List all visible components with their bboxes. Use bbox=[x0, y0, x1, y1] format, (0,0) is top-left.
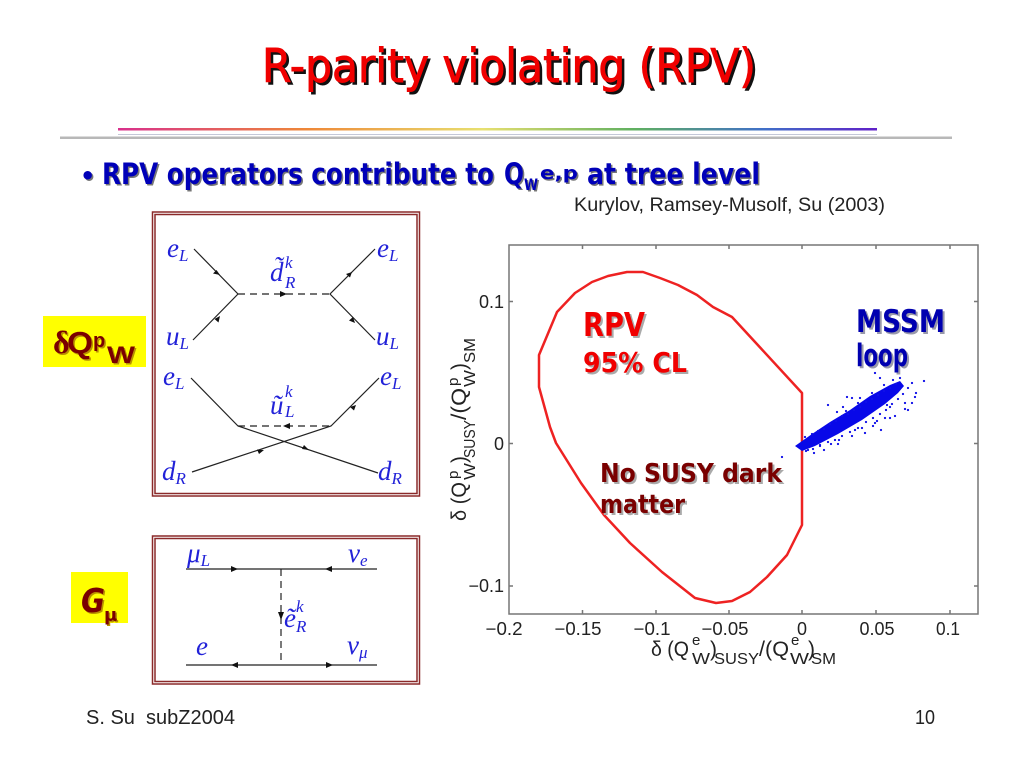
y axis title: W bbox=[462, 369, 479, 387]
panel: muon decay diagram: μ bbox=[187, 538, 201, 568]
panel: muon decay diagram: e bbox=[360, 551, 368, 570]
plot frame with ticks bbox=[509, 245, 978, 614]
label: delta Q p W: δ bbox=[54, 326, 71, 362]
label: delta Q p W: W bbox=[107, 342, 135, 369]
axis tick labels: 0.05 bbox=[860, 619, 894, 639]
x axis title: /(Q bbox=[759, 638, 789, 661]
label: G mu: G bbox=[82, 582, 106, 622]
citation: Kurylov, Ramsey-Musolf, Su (2003) bbox=[574, 195, 885, 216]
panel: muon decay diagram: ν bbox=[348, 538, 360, 568]
panel: neutral current diagrams: e bbox=[167, 233, 179, 263]
title: R-parity violating (RPV) bbox=[264, 42, 758, 96]
panel: muon decay diagram: e bbox=[196, 631, 208, 661]
annotation: RPV 95% CL: 95% CL bbox=[583, 346, 687, 379]
panel: muon decay diagram: L bbox=[200, 551, 210, 570]
panel: neutral current diagrams: e bbox=[377, 233, 389, 263]
label: delta Q p W bbox=[43, 316, 146, 370]
axis tick labels bbox=[468, 292, 960, 639]
label: delta Q p W: δ bbox=[53, 324, 70, 360]
panel: neutral current diagrams: e bbox=[380, 361, 392, 391]
axis tick labels: −0.1 bbox=[634, 619, 670, 639]
chart: Qw scatter plot bbox=[445, 245, 978, 668]
panel: neutral current diagrams: L bbox=[391, 374, 401, 393]
annotation: No SUSY dark matter: matter bbox=[600, 490, 685, 520]
axis tick labels: 0.1 bbox=[936, 619, 960, 639]
axis tick labels: −0.15 bbox=[554, 619, 602, 639]
panel: neutral current diagrams: d̃ bbox=[270, 257, 285, 287]
panel: neutral current diagrams: u bbox=[166, 321, 180, 351]
bullet heading: W bbox=[524, 175, 538, 194]
annotation: MSSM loop: MSSM bbox=[858, 306, 947, 342]
x axis title: W bbox=[692, 651, 711, 668]
panel: neutral current diagrams: k bbox=[285, 253, 293, 272]
bullet heading: W bbox=[526, 176, 540, 196]
x axis title: W bbox=[790, 651, 810, 668]
y axis title: ) bbox=[448, 456, 471, 463]
y axis title: SM bbox=[462, 338, 479, 363]
panel: neutral current diagrams: u bbox=[376, 321, 390, 351]
axis tick labels: 0 bbox=[494, 434, 504, 454]
panel: muon decay diagram: ẽ bbox=[284, 603, 297, 633]
annotation: No SUSY dark matter: No SUSY dark bbox=[602, 461, 785, 491]
panel: neutral current diagrams: R bbox=[390, 469, 402, 488]
bullet heading: RPV operators contribute to bbox=[104, 158, 496, 192]
bullet heading: e,p bbox=[542, 164, 580, 186]
annotation: No SUSY dark matter: matter bbox=[602, 492, 687, 522]
x axis title: e bbox=[791, 632, 799, 649]
axis tick labels: −0.05 bbox=[702, 619, 748, 639]
y axis title: δ (Q bbox=[448, 482, 471, 521]
panel: neutral current diagrams: e bbox=[163, 361, 175, 391]
annotation: MSSM loop: MSSM bbox=[856, 304, 945, 340]
label: delta Q p W: W bbox=[108, 344, 137, 370]
annotation: RPV 95% CL: RPV bbox=[585, 307, 647, 346]
annotation: MSSM loop: loop bbox=[858, 340, 910, 376]
annotation: MSSM loop bbox=[856, 304, 947, 376]
x axis title: δ (Q bbox=[651, 638, 689, 661]
y axis title: SUSY bbox=[462, 420, 479, 458]
footer: page number: 10 bbox=[915, 707, 935, 729]
axis tick labels: 0.1 bbox=[479, 292, 504, 312]
panel: neutral current diagrams: k bbox=[285, 382, 293, 401]
bullet heading: Q bbox=[504, 157, 524, 191]
bullet heading: at tree level bbox=[588, 158, 762, 192]
panel: muon decay diagram: R bbox=[295, 617, 307, 636]
y axis title: ) bbox=[448, 363, 471, 370]
MSSM loop scatter bbox=[782, 373, 924, 457]
x axis title: e bbox=[692, 632, 700, 649]
panel: neutral current diagrams: L bbox=[388, 334, 399, 353]
axis tick labels: 0 bbox=[797, 619, 807, 639]
bullet heading: at tree level bbox=[587, 157, 760, 191]
x axis title: SUSY bbox=[714, 651, 759, 668]
annotation: RPV 95% CL: RPV bbox=[583, 305, 645, 344]
label: delta Q p W: Q bbox=[68, 326, 94, 362]
panel: neutral current diagrams: R bbox=[284, 273, 296, 292]
title divider lines bbox=[60, 128, 952, 139]
label: G mu: μ bbox=[104, 605, 117, 626]
RPV contour bbox=[539, 272, 802, 603]
panel: neutral current diagrams: L bbox=[284, 402, 294, 421]
panel: neutral current diagrams: L bbox=[388, 246, 398, 265]
panel: neutral current diagrams: d bbox=[378, 456, 392, 486]
x axis title bbox=[651, 632, 836, 668]
panel: neutral current diagrams: R bbox=[174, 469, 186, 488]
panel: neutral current diagrams: L bbox=[178, 334, 189, 353]
panel: muon decay diagram: k bbox=[296, 597, 304, 616]
y axis title: p bbox=[445, 378, 462, 386]
label: G mu: G bbox=[81, 581, 105, 620]
title: R-parity violating (RPV) bbox=[262, 39, 756, 93]
bullet heading bbox=[80, 157, 762, 196]
footer: author: S. Su subZ2004 bbox=[86, 707, 235, 729]
bullet heading: e,p bbox=[540, 163, 578, 184]
panel: muon decay diagram bbox=[152, 536, 420, 684]
annotation: RPV 95% CL: 95% CL bbox=[585, 348, 689, 381]
label: delta Q p W: Q bbox=[67, 325, 93, 360]
label: G mu bbox=[71, 572, 128, 628]
panel: neutral current diagrams: ũ bbox=[270, 390, 284, 420]
axis tick labels: −0.1 bbox=[468, 576, 504, 596]
y axis title: p bbox=[445, 471, 462, 479]
label: delta Q p W: p bbox=[93, 330, 105, 352]
annotation: RPV 95% CL bbox=[583, 305, 689, 381]
panel: neutral current diagrams: L bbox=[174, 374, 184, 393]
axis tick labels: −0.2 bbox=[486, 619, 522, 639]
panel: neutral current diagrams: L bbox=[178, 246, 188, 265]
label: delta Q p W: p bbox=[94, 332, 107, 354]
x axis title: SM bbox=[811, 651, 836, 668]
bullet heading: • bbox=[82, 164, 97, 192]
panel: muon decay diagram: μ bbox=[358, 643, 368, 662]
y axis title: /(Q bbox=[448, 388, 471, 420]
panel: neutral current diagrams bbox=[152, 212, 420, 496]
x axis title: ) bbox=[808, 638, 815, 661]
panel: neutral current diagrams: d bbox=[162, 456, 176, 486]
y axis title bbox=[445, 338, 479, 521]
x axis title: ) bbox=[710, 638, 717, 661]
bullet heading: • bbox=[80, 162, 95, 190]
y axis title: W bbox=[462, 462, 479, 480]
annotation: No SUSY dark matter bbox=[600, 459, 785, 522]
bullet heading: Q bbox=[506, 158, 526, 192]
panel: muon decay diagram: ν bbox=[347, 630, 359, 660]
bullet heading: RPV operators contribute to bbox=[102, 157, 494, 191]
annotation: No SUSY dark matter: No SUSY dark bbox=[600, 459, 783, 489]
label: G mu: μ bbox=[106, 606, 119, 628]
annotation: MSSM loop: loop bbox=[856, 338, 908, 374]
